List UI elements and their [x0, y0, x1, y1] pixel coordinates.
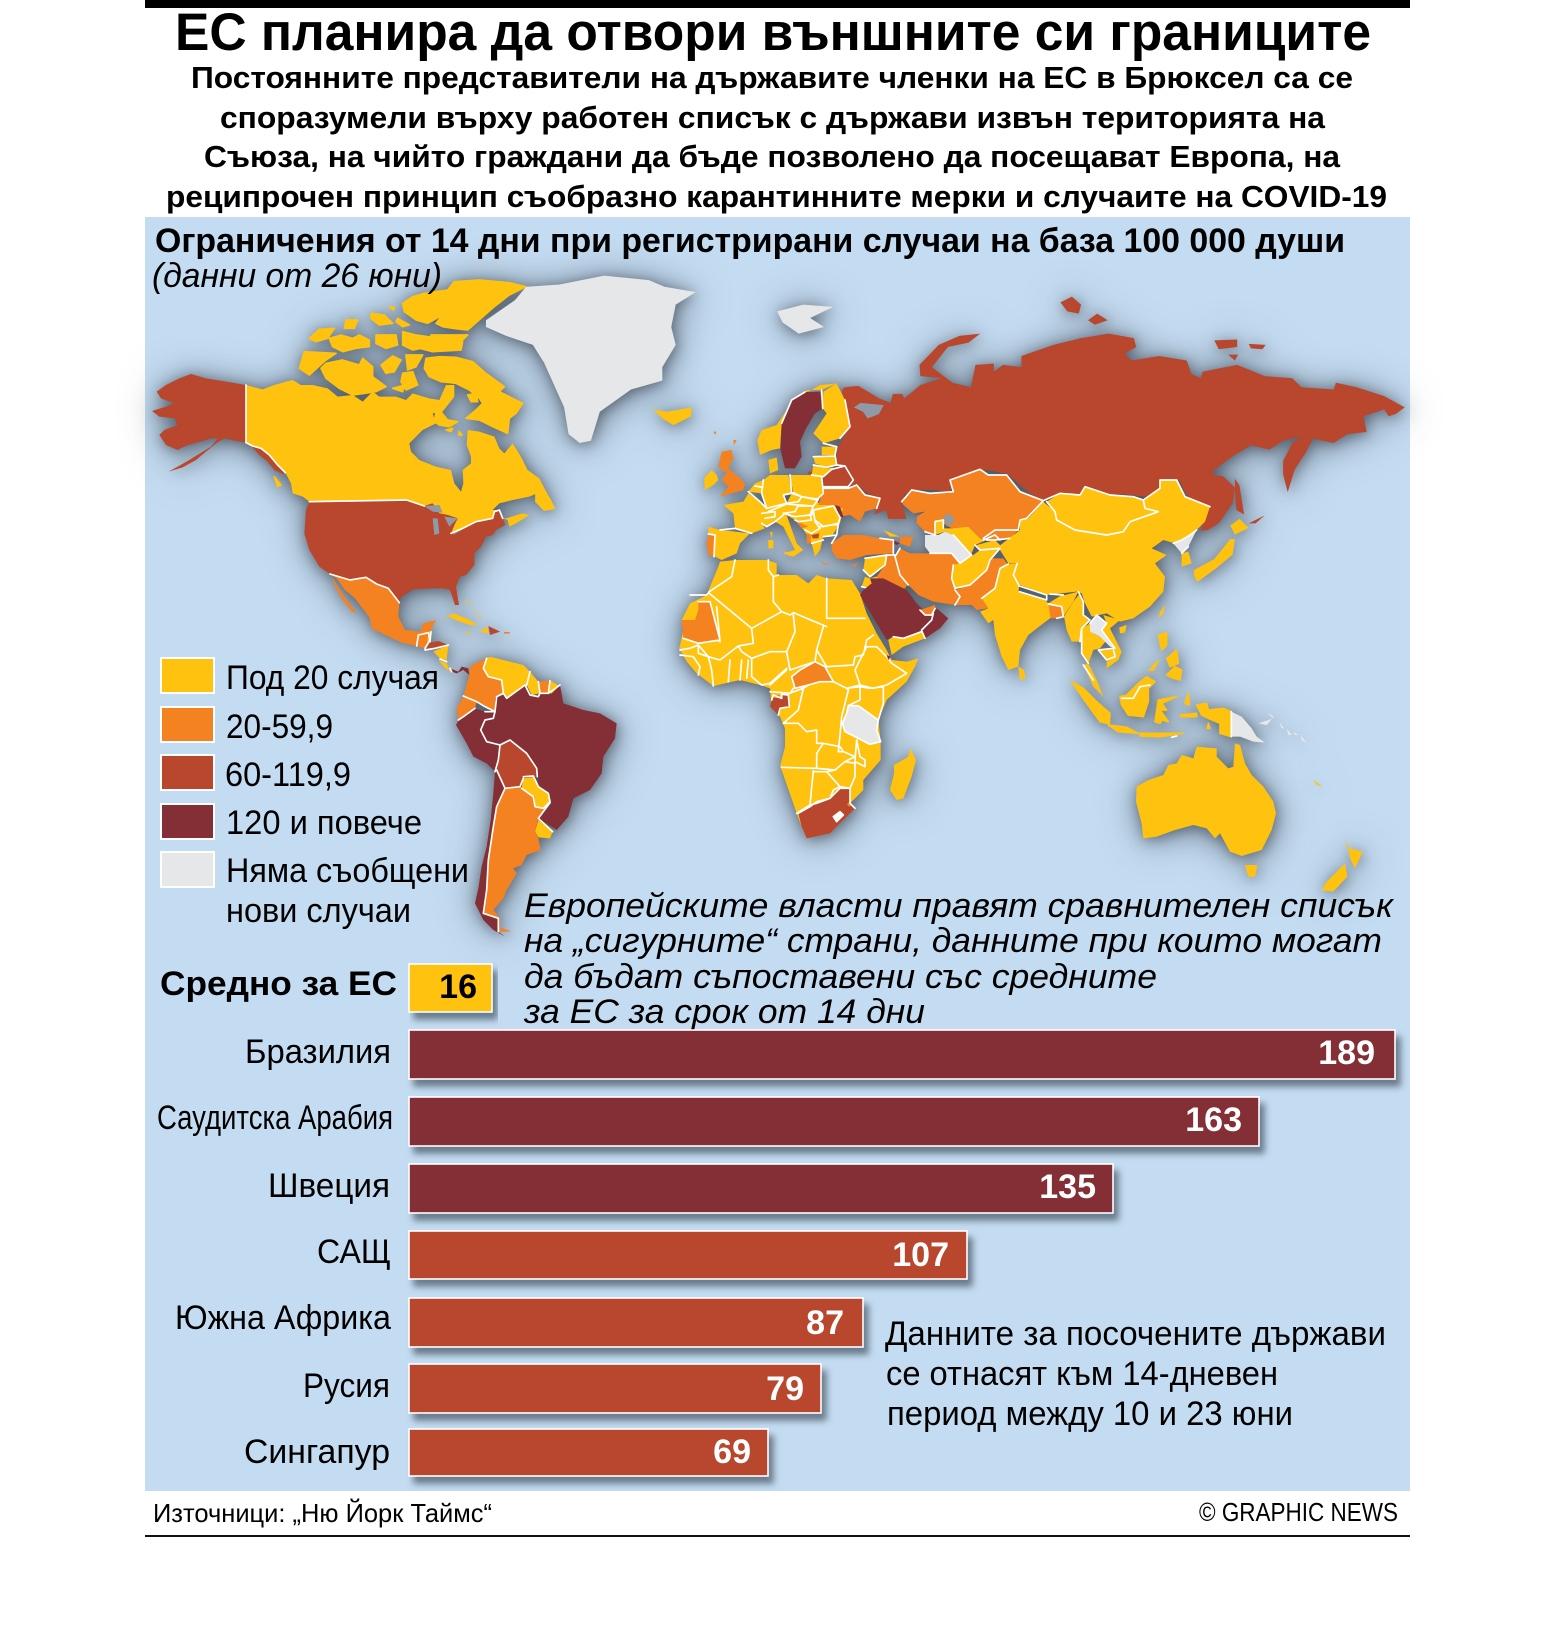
data period note — [885, 1315, 1386, 1433]
bar: USA: 107 — [892, 1236, 949, 1274]
italic note: Европейските власти правят сравнителен списък — [524, 887, 1395, 925]
copyright: © GRAPHIC NEWS — [1199, 1497, 1398, 1527]
intro text — [166, 60, 1387, 214]
intro text: реципрочен принцип съобразно карантинните мерки и случаите на COVID-19 — [166, 179, 1387, 214]
bar: Brazil: Бразилия — [245, 1033, 391, 1071]
map subtitle — [152, 222, 1345, 295]
bar: Sweden — [268, 1164, 1113, 1213]
legend: Под 20 случая — [226, 659, 439, 697]
map: South-East Asia and Oceania — [1072, 633, 1363, 892]
world map — [152, 276, 1405, 937]
EU average — [160, 964, 492, 1012]
intro text: Постоянните представители на държавите членки на ЕС в Брюксел са се — [191, 60, 1353, 95]
bar: Sweden: Швеция — [268, 1167, 390, 1205]
legend: нови случаи — [226, 892, 411, 930]
top black bar — [145, 0, 1410, 8]
intro text: споразумели върху работен списък с държави извън територията на — [220, 100, 1326, 135]
source: Източници: „Ню Йорк Таймс“ — [153, 1498, 492, 1528]
bar: Saudi Arabia: Саудитска Арабия — [157, 1099, 393, 1137]
map: North America — [152, 280, 554, 605]
bar: Singapore — [244, 1429, 768, 1476]
bar: South Africa — [175, 1298, 863, 1347]
legend: 60-119,9 — [225, 756, 351, 794]
bar: South Africa: 87 — [806, 1304, 844, 1342]
map: Central and South America — [330, 574, 617, 937]
map: Greenland and Iceland — [486, 276, 696, 443]
bar: Russia — [303, 1364, 821, 1413]
legend: 120 и повече — [226, 804, 422, 842]
bar: Brazil — [245, 1030, 1395, 1079]
bar: USA: САЩ — [317, 1233, 391, 1271]
map subtitle: Ограничения от 14 дни при регистрирани случаи на база 100 000 души — [155, 222, 1345, 260]
italic note: за ЕС за срок от 14 дни — [523, 993, 925, 1031]
bar: Singapore: Сингапур — [244, 1433, 390, 1471]
legend: Няма съобщени — [226, 852, 469, 890]
bar: Saudi Arabia — [157, 1097, 1259, 1146]
bar: South Africa: Южна Африка — [175, 1299, 391, 1337]
map subtitle: (данни от 26 юни) — [152, 257, 442, 295]
EU average: 16 — [439, 968, 477, 1006]
legend: 20-59,9 — [226, 708, 333, 746]
data period note: период между 10 и 23 юни — [887, 1395, 1293, 1433]
title: ЕС планира да отвори външните си границите — [175, 3, 1371, 62]
bar: Russia: 79 — [766, 1370, 804, 1408]
panel: light blue background — [145, 217, 1410, 1491]
bar: Saudi Arabia: 163 — [1185, 1101, 1242, 1139]
bar: Brazil: 189 — [1318, 1034, 1375, 1072]
bar: Sweden: 135 — [1039, 1168, 1096, 1206]
map: Europe and Middle East — [704, 383, 913, 590]
bar chart — [157, 1030, 1395, 1476]
data period note: се отнасят към 14-дневен — [886, 1355, 1278, 1393]
italic note: да бъдат съпоставени със средните — [524, 958, 1157, 996]
intro text: Съюза, на чийто граждани да бъде позволено да посещават Европа, на — [204, 139, 1341, 174]
map: Africa and Arabia — [679, 560, 948, 838]
data period note: Данните за посочените държави — [885, 1315, 1386, 1353]
map: Central, South and East Asia — [895, 469, 1220, 697]
bar: Russia: Русия — [303, 1367, 390, 1405]
italic note — [523, 887, 1395, 1031]
legend — [161, 658, 469, 930]
bar: USA — [317, 1231, 967, 1279]
bar: Singapore: 69 — [713, 1433, 751, 1471]
italic note: на „сигурните“ страни, данните при които могат — [524, 922, 1382, 960]
bottom rule — [145, 1535, 1410, 1537]
EU average: Средно за ЕС — [160, 965, 397, 1003]
map: Russia and northern Asia — [777, 297, 1405, 581]
